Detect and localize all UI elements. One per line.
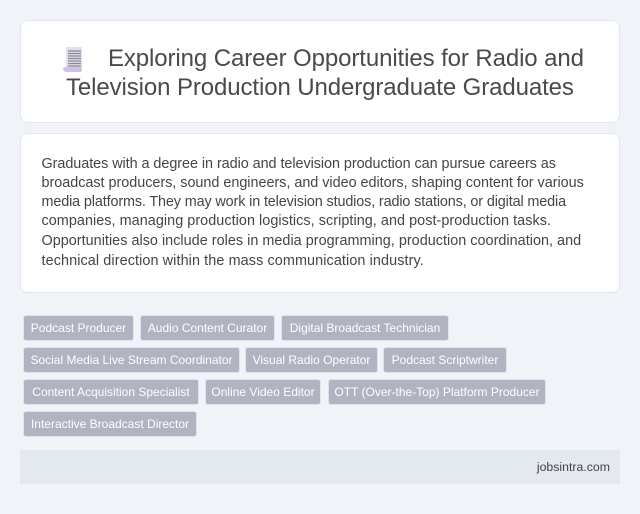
tag: Online Video Editor — [205, 379, 321, 405]
job tags — [23, 315, 546, 437]
title: Television Production Undergraduate Graduates — [66, 74, 574, 101]
tag: Social Media Live Stream Coordinator: Social Media Live Stream Coordinator — [30, 353, 233, 367]
tag: Audio Content Curator — [140, 315, 275, 341]
description text: broadcast producers, sound engineers, and video editors, shaping content for various — [42, 175, 584, 191]
footer source: jobsintra.com — [537, 460, 610, 474]
panel: title card — [20, 20, 620, 123]
description text — [42, 156, 584, 269]
tag: Digital Broadcast Technician — [281, 315, 449, 341]
tag: Digital Broadcast Technician: Digital Broadcast Technician — [290, 321, 440, 335]
tag: Online Video Editor: Online Video Editor — [211, 385, 315, 399]
tag: Content Acquisition Specialist: Content Acquisition Specialist — [32, 385, 190, 399]
tag: Interactive Broadcast Director — [23, 411, 197, 437]
title — [66, 45, 584, 101]
tag: Podcast Producer — [23, 315, 134, 341]
tag: Content Acquisition Specialist — [23, 379, 199, 405]
icon: document scroll — [63, 47, 82, 72]
tag: Social Media Live Stream Coordinator — [23, 347, 240, 373]
tag: Audio Content Curator: Audio Content Curator — [148, 321, 267, 335]
description text: Graduates with a degree in radio and television production can pursue careers as — [42, 156, 556, 172]
panel: description — [20, 133, 620, 293]
tag: Podcast Producer: Podcast Producer — [31, 321, 126, 335]
description text: companies, managing production logistics, scripting, and post-production tasks. — [42, 213, 551, 229]
description text: media platforms. They may work in television studios, radio stations, or digital media — [42, 194, 566, 210]
tag: Visual Radio Operator: Visual Radio Operator — [253, 353, 370, 367]
footer bar — [20, 450, 620, 484]
tag: Podcast Scriptwriter: Podcast Scriptwriter — [392, 353, 498, 367]
tag: OTT (Over-the-Top) Platform Producer — [328, 379, 546, 405]
tag: Visual Radio Operator — [245, 347, 378, 373]
tag: Podcast Scriptwriter — [383, 347, 507, 373]
tag: Interactive Broadcast Director: Interactive Broadcast Director — [31, 417, 189, 431]
description text: technical direction within the mass communication industry. — [42, 253, 424, 269]
tag: OTT (Over-the-Top) Platform Producer: OTT (Over-the-Top) Platform Producer — [334, 385, 540, 399]
description text: Opportunities also include roles in media programming, production coordination, and — [42, 233, 581, 249]
title: Exploring Career Opportunities for Radio and — [108, 45, 584, 72]
